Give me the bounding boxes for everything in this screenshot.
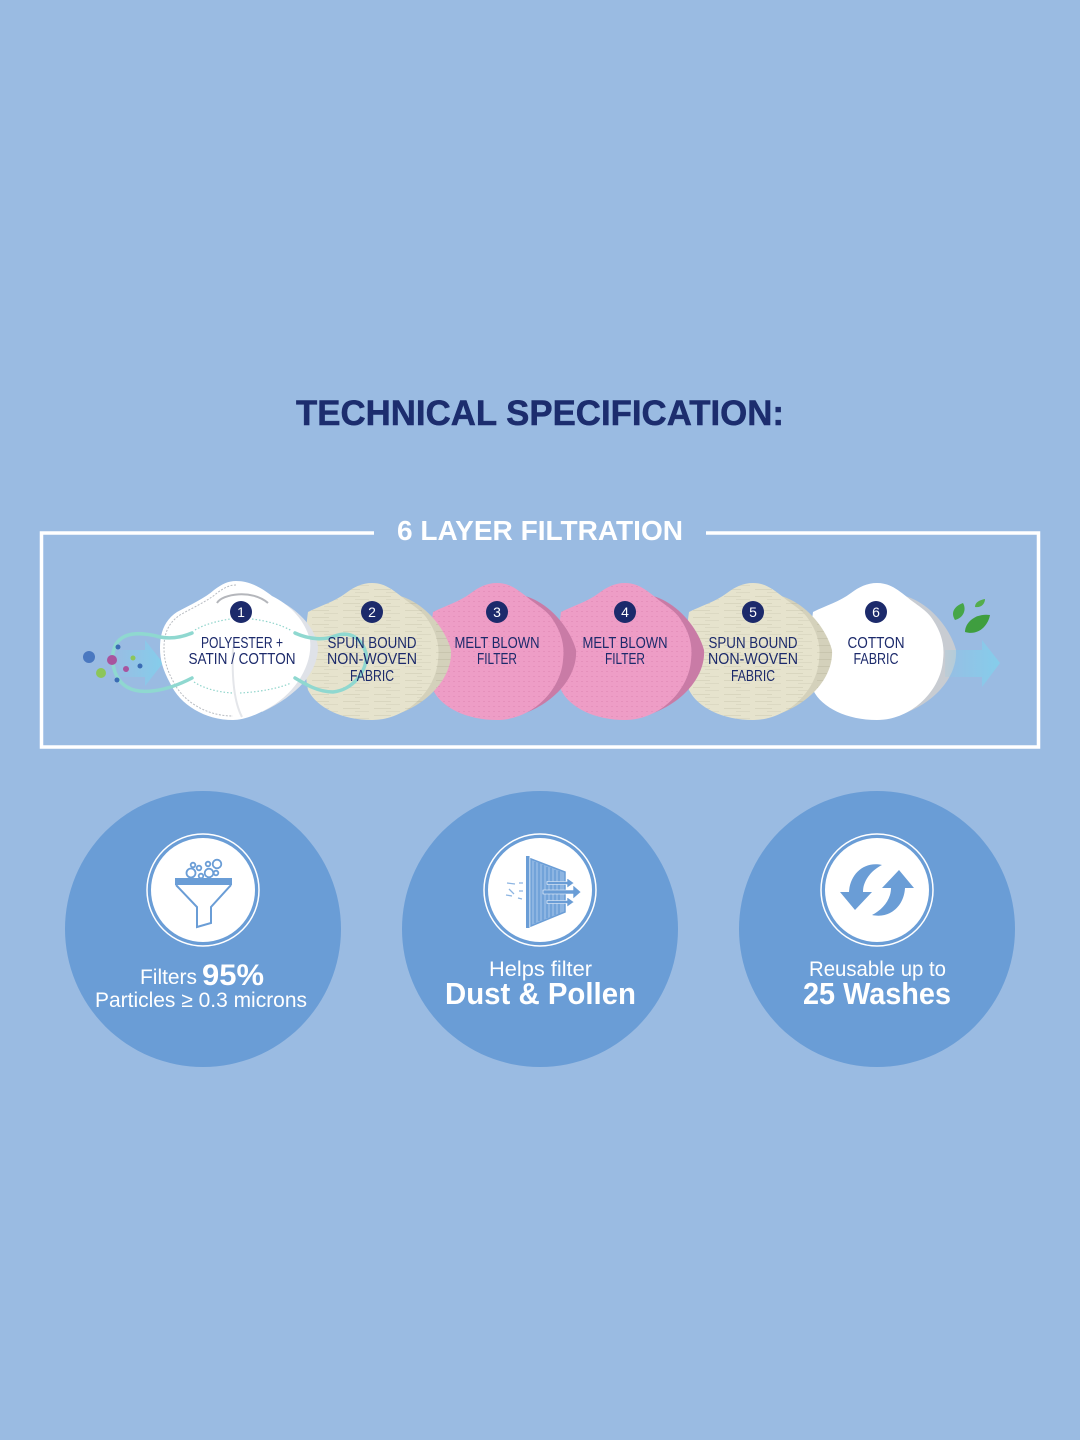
icon: funnel — [147, 834, 259, 946]
feature text — [95, 959, 307, 1012]
layer 4: melt blown filter — [558, 583, 704, 720]
feature text — [803, 958, 951, 1011]
feature: filters 95% — [65, 791, 341, 1067]
feature text: Filters — [140, 966, 197, 989]
icon: leaves — [953, 599, 990, 633]
feature text — [445, 958, 636, 1011]
layer 3: melt blown filter: 3 — [493, 604, 501, 620]
feature text: 95% — [202, 959, 264, 992]
feature text: Dust & Pollen — [445, 976, 636, 1011]
layer 3: melt blown filter: FILTER — [477, 651, 517, 668]
layer 5: spun bound non-woven fabric: SPUN BOUND — [708, 635, 798, 652]
feature text: Helps filter — [489, 958, 592, 981]
layer 1: polyester and satin cotton mask: 1 — [237, 604, 245, 620]
layer 5: spun bound non-woven fabric: FABRIC — [731, 668, 775, 685]
layer 5: spun bound non-woven fabric: 5 — [749, 604, 757, 620]
layer 3: melt blown filter: MELT BLOWN — [454, 635, 540, 652]
layer 1: polyester and satin cotton mask: SATIN / COTTON — [188, 651, 296, 668]
layer 6: cotton fabric — [810, 583, 956, 720]
layer 6: cotton fabric: FABRIC — [854, 651, 898, 668]
panel: 6 layer filtration — [42, 515, 1038, 747]
feature text: 25 Washes — [803, 976, 951, 1011]
feature: 25 washes — [739, 791, 1015, 1067]
layer 1: polyester and satin cotton mask: POLYESTER + — [201, 635, 283, 652]
layer 2: spun bound non-woven fabric — [305, 583, 451, 720]
layer 5: spun bound non-woven fabric: NON-WOVEN — [708, 651, 798, 668]
layer 6: cotton fabric: 6 — [872, 604, 880, 620]
panel frame — [42, 533, 1038, 747]
incoming arrow — [118, 640, 163, 686]
layer 2 label: SPUN BOUND — [328, 635, 416, 652]
layer 6: cotton fabric: COTTON — [848, 635, 904, 652]
layer 4: melt blown filter: 4 — [621, 604, 629, 620]
layer 1: polyester and satin cotton mask — [160, 581, 318, 720]
particles — [83, 644, 142, 682]
layer 4: melt blown filter: FILTER — [605, 651, 645, 668]
layer 2: spun bound non-woven fabric: 2 — [368, 604, 376, 620]
layer 2 label: NON-WOVEN — [327, 651, 417, 668]
title: TECHNICAL SPECIFICATION: — [296, 394, 784, 433]
feature text: Reusable up to — [809, 958, 946, 981]
layer 2 label: FABRIC — [350, 668, 394, 685]
icon: filter — [484, 834, 596, 946]
feature: dust and pollen — [402, 791, 678, 1067]
layer 5: spun bound non-woven fabric — [686, 583, 832, 720]
layer 3: melt blown filter — [430, 583, 576, 720]
icon: outgoing clean air arrow — [945, 640, 1000, 687]
icon: reuse arrows — [821, 834, 933, 946]
panel heading: 6 LAYER FILTRATION — [397, 515, 683, 546]
layer 4: melt blown filter: MELT BLOWN — [582, 635, 668, 652]
ear loops — [113, 633, 366, 692]
feature text: Particles ≥ 0.3 microns — [95, 989, 307, 1012]
